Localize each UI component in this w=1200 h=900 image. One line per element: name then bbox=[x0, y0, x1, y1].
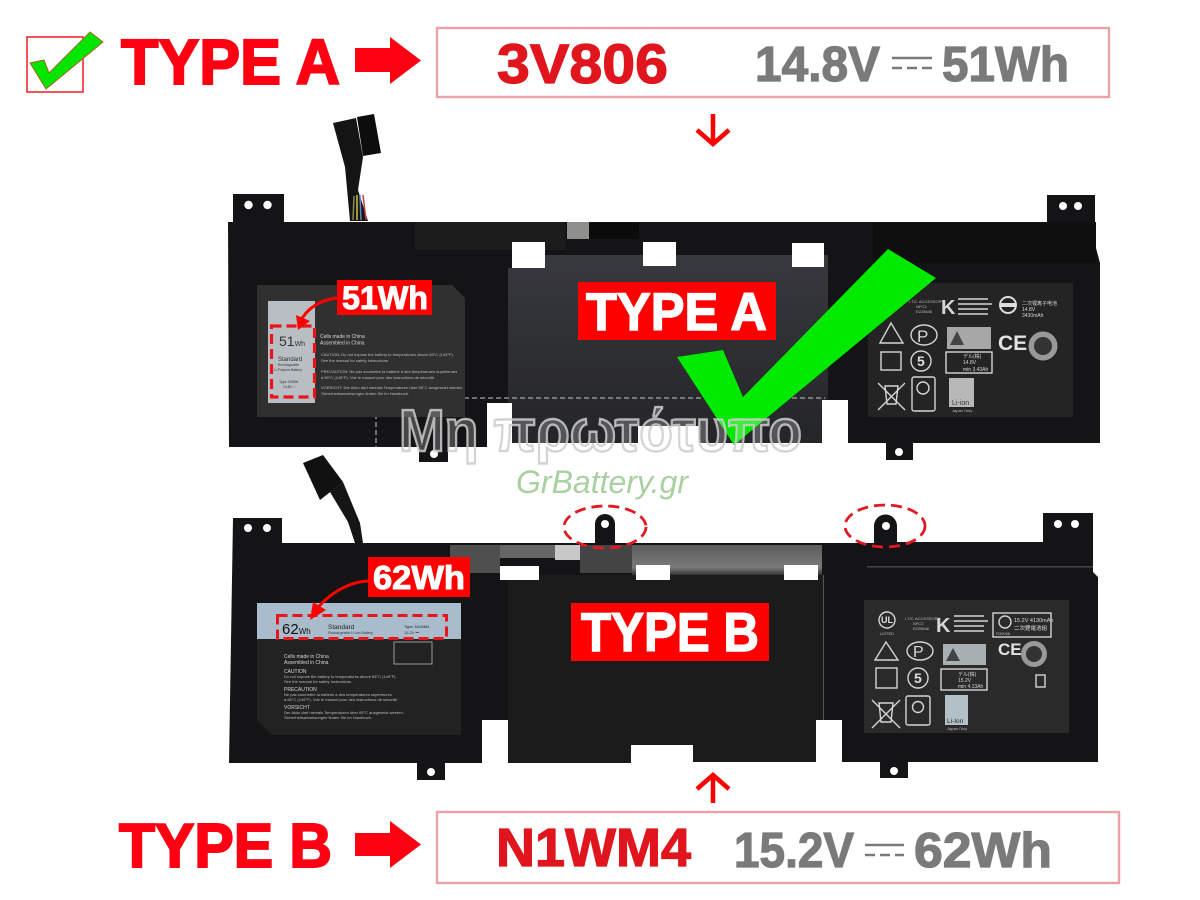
right label A: デル(株) bbox=[963, 353, 982, 360]
callout: 51Wh bbox=[296, 280, 432, 330]
left label B: Assembled in China bbox=[284, 660, 329, 666]
right label A bbox=[868, 283, 1073, 417]
right label B: R39068 bbox=[996, 631, 1011, 636]
right label B: Li-Ion bbox=[947, 718, 964, 725]
center panel A bbox=[508, 255, 828, 443]
highlight: center tab bbox=[564, 506, 646, 548]
right label A: 3430mAh bbox=[1022, 313, 1044, 319]
watermark: not original: Μη πρωτότυπο bbox=[399, 398, 802, 464]
icon: big green check mark bbox=[677, 249, 936, 445]
DC symbol bbox=[892, 58, 932, 68]
right label A: 14.8V bbox=[1022, 307, 1036, 313]
right label B: UL bbox=[881, 615, 893, 625]
right label A: CE bbox=[998, 332, 1027, 355]
panel: TYPE B spec box bbox=[437, 812, 1119, 883]
right label B: Japan Only bbox=[947, 726, 967, 731]
arrow: TYPE A to spec box bbox=[355, 37, 421, 84]
left label A: à 65°C (149°F). Voir le manuel pour des instructions de sécurité. bbox=[321, 375, 435, 380]
capacity 62Wh: 62Wh bbox=[914, 824, 1052, 878]
right label B bbox=[864, 600, 1069, 733]
left label B: Rechargeable Li-Ion Battery bbox=[328, 631, 373, 635]
capacity 51Wh: 51Wh bbox=[942, 38, 1069, 92]
left label B: 15.2V ⎓ bbox=[404, 630, 420, 635]
right label A: 5 bbox=[917, 353, 925, 369]
voltage 14.8V: 14.8V bbox=[755, 38, 880, 92]
right label B: K bbox=[936, 615, 951, 637]
left label A: See the manual for safety instructions. bbox=[321, 358, 389, 363]
mounting holes and windows B bbox=[244, 520, 1079, 776]
arrow: down to battery A bbox=[697, 114, 729, 144]
left label B: à 65°C (149°F). Voir le manuel pour des instructions de sécurité. bbox=[284, 697, 398, 702]
heading: TYPE A: TYPE A bbox=[121, 26, 340, 98]
left label A: Li-Polymer Battery bbox=[274, 368, 302, 372]
left label B: Der Akku darf niemals Temperaturen über 65°C ausgesetzt werden. bbox=[284, 710, 404, 715]
left label A: Assembled in China bbox=[320, 340, 365, 346]
highlight: right tab bbox=[845, 505, 925, 547]
arrow: TYPE B to spec box bbox=[355, 821, 421, 868]
voltage 15.2V: 15.2V bbox=[734, 824, 854, 878]
right label B: デル(株) bbox=[958, 671, 977, 678]
left label B: CAUTION bbox=[284, 669, 307, 675]
right label A: K bbox=[941, 297, 956, 319]
left label A: VORSICHT: Der Akku darf niemals Temperaturen über 65°C ausgesetzt werden. bbox=[321, 385, 463, 390]
left label B: Sicherheitsanweisungen finden Sie im Handbuch. bbox=[284, 715, 372, 720]
left label B: Do not expose the battery to temperatures above 65°C (149°F). bbox=[284, 674, 397, 679]
left label A: Cells made in China bbox=[320, 334, 365, 340]
battery: TYPE A bbox=[228, 114, 1100, 462]
part number 3V806: 3V806 bbox=[497, 32, 668, 95]
left label A: Standard bbox=[278, 357, 302, 363]
battery: TYPE B bbox=[229, 455, 1098, 780]
right label A: Li-ion bbox=[952, 400, 969, 407]
left label B: 62Wh bbox=[282, 621, 311, 638]
right label A: Japan Only bbox=[952, 408, 972, 413]
right label B: 15.2V bbox=[958, 678, 972, 684]
right label B: 15.2V 4130mAh bbox=[1014, 618, 1053, 624]
left label B bbox=[257, 603, 461, 735]
left label B: See the manual for safety instructions. bbox=[284, 679, 352, 684]
left label B: Type: N1WM4 bbox=[404, 624, 430, 629]
right label B: CE bbox=[998, 640, 1022, 659]
right label A: P bbox=[917, 327, 928, 346]
right label A: I.T.E. ACCESSORY bbox=[909, 299, 944, 304]
cable and connector A bbox=[333, 114, 381, 221]
left label A: Sicherheitsanweisungen finden Sie im Handbuch. bbox=[321, 391, 409, 396]
battery body A bbox=[228, 194, 1100, 462]
right label B: 二次鋰電池組 bbox=[1014, 624, 1048, 632]
left label B: Standard bbox=[328, 624, 355, 631]
left label A: CAUTION: Do not expose the battery to temperatures above 65°C (149°F). bbox=[321, 352, 454, 357]
battery body B bbox=[229, 513, 1098, 780]
part number N1WM4: N1WM4 bbox=[496, 818, 691, 878]
watermark: GrBattery.gr: GrBattery.gr bbox=[516, 464, 689, 500]
badge: TYPE B: TYPE B bbox=[581, 601, 759, 663]
right label A: NFC3 bbox=[916, 304, 927, 309]
right label B: LISTED bbox=[880, 631, 894, 636]
top strip B bbox=[450, 545, 500, 573]
dashed cut line bbox=[376, 398, 825, 447]
callout: 62Wh: 62Wh bbox=[373, 559, 465, 596]
right label B: NFC3 bbox=[913, 621, 924, 626]
heading: TYPE B: TYPE B bbox=[119, 812, 332, 881]
left label A: 14.8V ⎓ bbox=[283, 385, 296, 389]
center panel B bbox=[508, 575, 823, 763]
right label B: I.T.E. ACCESSORY bbox=[905, 616, 940, 621]
mounting holes and windows A bbox=[244, 201, 1082, 458]
left label B: Ne pas soumettre la batterie à des températures supérieures bbox=[284, 692, 392, 697]
DC symbol bbox=[865, 845, 904, 855]
right label B: E225846 bbox=[913, 626, 930, 631]
right label A: min 3.43Ah bbox=[963, 367, 989, 373]
left label A: Rechargeable bbox=[278, 363, 299, 367]
callout: 51Wh: 51Wh bbox=[342, 280, 428, 316]
left label B: VORSICHT bbox=[284, 705, 310, 711]
right label A: 14.8V bbox=[963, 360, 977, 366]
callout: 62Wh bbox=[310, 557, 470, 620]
left label A: PRECAUTION: Ne pas soumettre la batterie à des températures supérieures bbox=[321, 369, 457, 374]
right label A: E225846 bbox=[916, 309, 933, 314]
left label B: PRECAUTION bbox=[284, 687, 317, 693]
arrow: up to battery B bbox=[697, 775, 729, 803]
cable and connector B bbox=[303, 455, 363, 543]
right label B: 5 bbox=[914, 670, 922, 686]
left label A bbox=[257, 285, 465, 417]
panel: TYPE A spec box bbox=[437, 28, 1109, 97]
right label B: min 4.13Ah bbox=[958, 684, 984, 690]
badge: TYPE A: TYPE A bbox=[586, 283, 767, 342]
right label A: 二次锂离子电池 bbox=[1022, 300, 1057, 307]
left label A: 51Wh bbox=[279, 333, 305, 349]
icon: green check in box bbox=[27, 32, 103, 92]
left label B: Cells made in China bbox=[284, 654, 329, 660]
right label B: P bbox=[913, 644, 924, 661]
left label A: Type 3V806 bbox=[279, 380, 298, 384]
